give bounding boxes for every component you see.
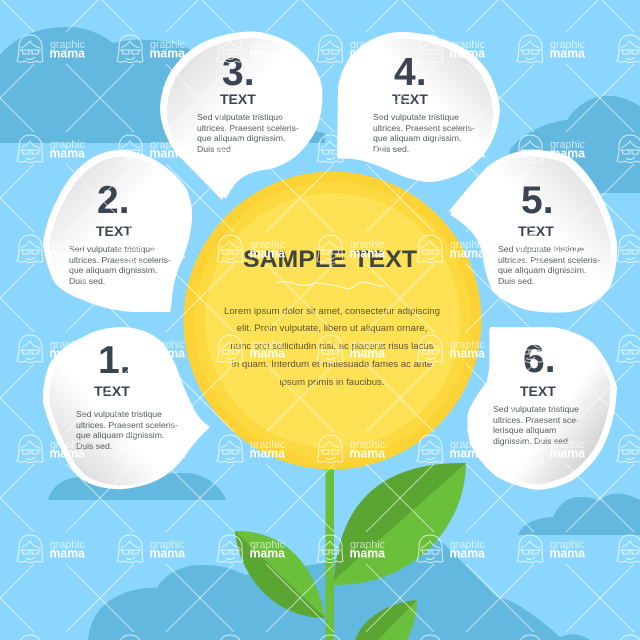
- panel: bubble 2: ultrices. Praesent sceleris-: [69, 255, 171, 265]
- cloud: under bubble 1: [48, 473, 226, 500]
- panel: bubble 3: ultrices. Praesent sceleris-: [197, 123, 299, 133]
- centre paragraph: ipsum primis in faucibus.: [279, 377, 385, 388]
- cloud: top left: [0, 27, 325, 143]
- panel: bubble 1: Duis sed.: [76, 441, 112, 451]
- panel: bubble 3: Sed vulputate tristique: [197, 112, 283, 122]
- panel: bubble 3: TEXT: [220, 91, 256, 107]
- panel: bubble 4: 4.: [394, 51, 427, 94]
- cloud: bottom right: [518, 494, 640, 535]
- panel: bubble 6: [467, 327, 617, 490]
- centre paragraph: in quam. Interdum et malesuada fames ac ante: [232, 359, 432, 370]
- large leaf: [334, 463, 466, 585]
- panel: bubble 1: 1.: [98, 339, 131, 382]
- centre paragraph: elit. Proin vulputate, libero ut aliquam ornare,: [237, 323, 427, 334]
- flower head: [184, 172, 482, 470]
- panel: bubble 5: 5.: [521, 179, 554, 222]
- panel: bubble 4: Duis sed.: [373, 144, 409, 154]
- cloud: top right: [500, 96, 640, 193]
- panel: bubble 2: Sed vulputate tristique: [69, 244, 155, 254]
- panel: bubble 6: TEXT: [520, 383, 556, 399]
- panel: bubble 6: lerisque aliquam: [493, 425, 556, 435]
- small leaf: [355, 600, 417, 640]
- panel: bubble 4: que aliquam dignissim.: [373, 133, 461, 143]
- centre paragraph: nunc orci sollicitudin nisi, ac placerat risus lacus: [230, 341, 434, 352]
- panel: bubble 6: 6.: [523, 338, 556, 381]
- panel: bubble 5: ultrices. Praesent sceleris-: [498, 255, 600, 265]
- panel: bubble 2: que aliquam dignissim.: [69, 265, 157, 275]
- panel: bubble 1: Sed vulputate tristique: [76, 409, 162, 419]
- panel: bubble 4: ultrices. Praesent sceleris-: [373, 123, 475, 133]
- panel: bubble 3: que aliquam dignissim.: [197, 133, 285, 143]
- panel: bubble 6: ultrices. Praesent sce-: [493, 415, 579, 425]
- centre paragraph: [224, 306, 440, 388]
- panel: bubble 4: TEXT: [392, 91, 428, 107]
- panel: bubble 6: dignissim. Duis sed: [493, 436, 568, 446]
- panel: bubble 3: [160, 32, 322, 200]
- squiggle: [277, 282, 385, 289]
- panel: bubble 5: que aliquam dignissim.: [498, 265, 586, 275]
- panel: bubble 3: Duis sed.: [197, 144, 233, 154]
- panel: bubble 1: [43, 327, 210, 489]
- panel: bubble 2: 2.: [97, 179, 130, 222]
- cloud: bottom left: [88, 525, 590, 640]
- panel: bubble 6: Sed vulputate tristique: [493, 404, 579, 414]
- panel: bubble 4: Sed vulputate tristique: [373, 112, 459, 122]
- flower stem: [326, 465, 334, 640]
- left leaf: [235, 531, 325, 618]
- panel: bubble 1: TEXT: [94, 383, 130, 399]
- panel: bubble 5: TEXT: [518, 223, 554, 239]
- panel: bubble 1: ultrices. Praesent sceleris-: [76, 420, 178, 430]
- centre paragraph: Lorem ipsum dolor sit amet, consectetur adipiscing: [224, 306, 440, 317]
- panel: bubble 2: [43, 150, 192, 312]
- panel: bubble 5: Duis sed.: [498, 276, 534, 286]
- panel: bubble 5: Sed vulputate tristique: [498, 244, 584, 254]
- panel: bubble 5: [449, 150, 617, 313]
- panel: bubble 4: [337, 32, 500, 182]
- panel: bubble 2: TEXT: [96, 223, 132, 239]
- panel: bubble 3: 3.: [222, 51, 255, 94]
- panel: bubble 1: que aliquam dignissim.: [76, 430, 164, 440]
- panel: bubble 2: Duis sed.: [69, 276, 105, 286]
- heading: sample text: SAMPLE TEXT: [243, 246, 417, 273]
